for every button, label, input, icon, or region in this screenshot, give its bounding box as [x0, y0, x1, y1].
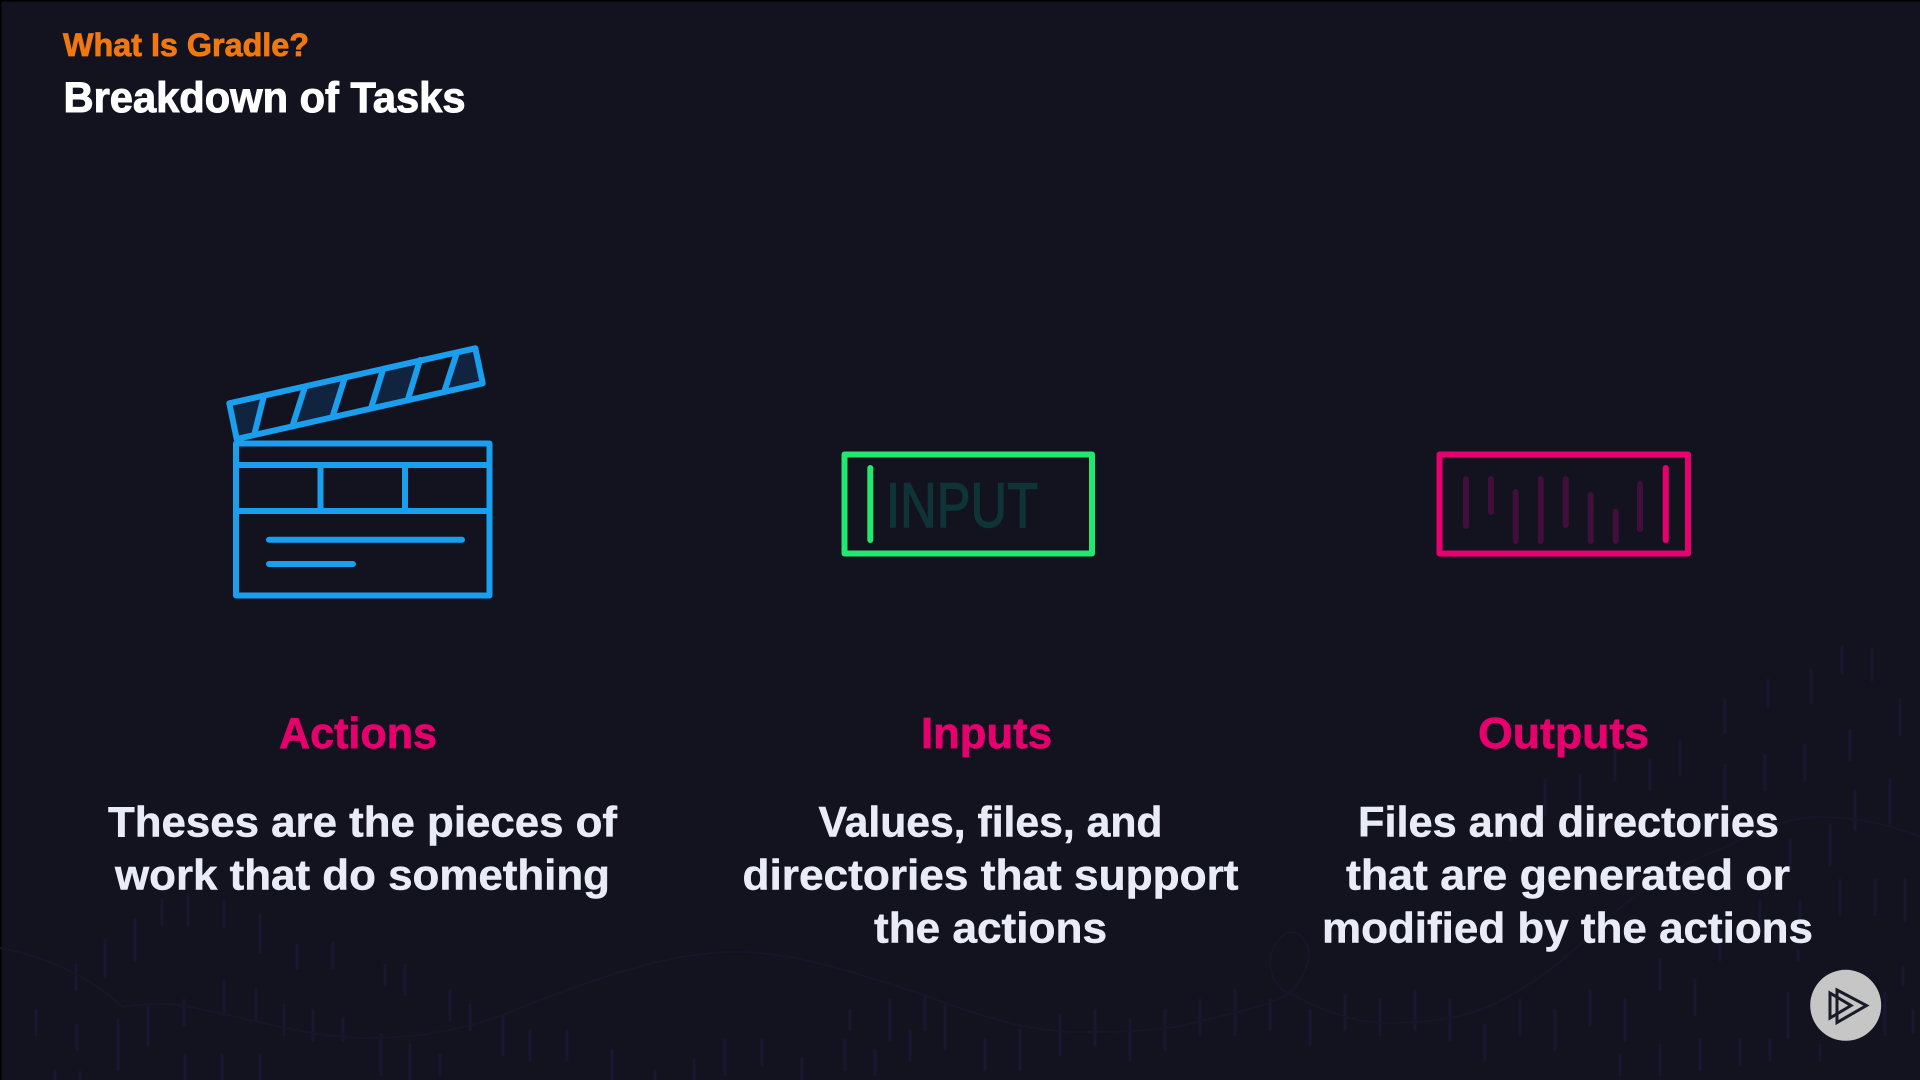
section label: What Is Gradle? [63, 27, 309, 63]
description: outputs: modified by the actions [1322, 904, 1813, 952]
header [63, 27, 466, 122]
faded output bars [1466, 479, 1640, 541]
column: inputs [742, 709, 1238, 952]
description: actions [108, 798, 618, 900]
output cursor [1663, 468, 1669, 540]
heading: actions: Actions [279, 709, 437, 758]
slide title: Breakdown of Tasks [64, 74, 466, 122]
description: outputs: that are generated or [1346, 852, 1790, 900]
description: actions: work that do something [114, 852, 610, 900]
description: inputs: Values, files, and [818, 798, 1162, 846]
description: inputs [742, 798, 1238, 952]
heading: inputs: Inputs [921, 709, 1052, 758]
description: outputs [1322, 798, 1813, 952]
input cursor [867, 468, 873, 540]
icon: play logo badge [1810, 970, 1881, 1041]
faded input text: INPUT [886, 471, 1038, 541]
heading: outputs: Outputs [1478, 709, 1649, 758]
column: actions [108, 709, 618, 900]
icon: input box [844, 454, 1092, 554]
output frame [1440, 454, 1688, 554]
column: outputs [1322, 709, 1813, 952]
description: outputs: Files and directories [1358, 798, 1779, 846]
description: actions: Theses are the pieces of [108, 798, 618, 846]
description: inputs: directories that support [742, 852, 1238, 900]
icon: clapperboard [229, 348, 490, 596]
input frame [844, 454, 1092, 554]
icon: output box [1440, 454, 1688, 554]
background pattern: rain dashes and wave [0, 647, 1920, 1080]
description: inputs: the actions [874, 904, 1107, 952]
